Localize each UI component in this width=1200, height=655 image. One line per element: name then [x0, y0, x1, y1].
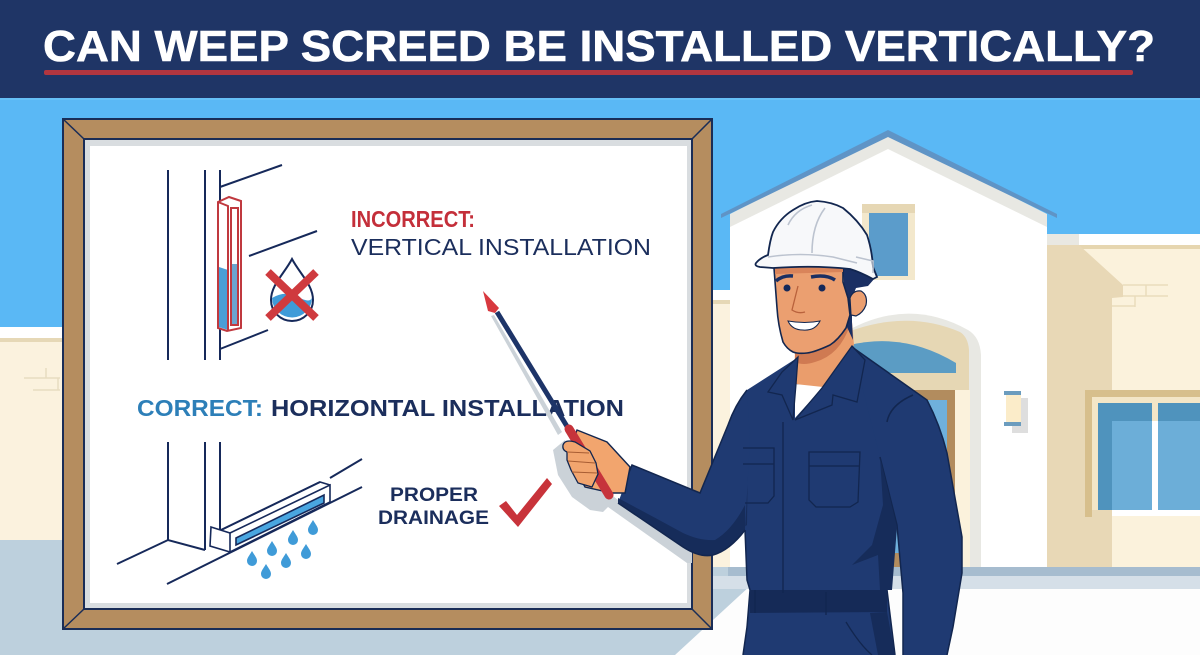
label: proper drainage: PROPER — [390, 485, 478, 506]
pointer and arm shadows on the board — [491, 315, 692, 563]
label: incorrect: VERTICAL INSTALLATION — [351, 234, 651, 260]
icon: water droplets — [247, 520, 318, 579]
right collar — [795, 346, 865, 420]
vertical weep screed in red outline — [218, 197, 241, 331]
cream wing behind house — [705, 290, 735, 567]
ear — [850, 291, 866, 316]
nose — [792, 286, 805, 313]
left side shadow — [740, 440, 748, 530]
neck — [794, 322, 854, 387]
label: correct: HORIZONTAL INSTALLATION — [271, 395, 624, 421]
face — [774, 266, 850, 353]
label: incorrect — [351, 206, 651, 260]
pavement kerb — [710, 567, 1200, 589]
pointer stick — [483, 291, 568, 428]
white shirt — [795, 384, 823, 418]
whiteboard frame — [63, 119, 712, 629]
diagram: correct horizontal installation — [117, 442, 362, 584]
wall lamp — [1004, 391, 1028, 433]
icon: red check mark — [499, 478, 552, 527]
right building wing — [1047, 234, 1200, 567]
main white house with gable roof — [721, 130, 1057, 567]
torso edge lines — [743, 530, 895, 655]
left neighbouring building — [0, 327, 70, 540]
forehead shadow — [775, 266, 843, 274]
left collar — [768, 357, 798, 420]
red pointer handle — [569, 429, 609, 495]
label: correct — [137, 395, 624, 421]
label: incorrect: INCORRECT: — [351, 206, 475, 232]
right chest pocket — [809, 452, 860, 507]
hand gripping the pointer — [563, 429, 630, 495]
fingers — [563, 441, 598, 487]
header banner — [0, 0, 1200, 100]
right arm — [852, 347, 962, 655]
palm — [568, 430, 630, 493]
left chest pocket — [743, 448, 774, 503]
belt — [750, 590, 887, 613]
torso — [738, 347, 900, 655]
right building window — [1085, 390, 1200, 517]
hard hat — [756, 201, 877, 279]
hair — [843, 266, 875, 340]
label: proper drainage — [378, 485, 489, 529]
presenter — [483, 201, 962, 655]
eyes and eyebrows — [776, 276, 835, 292]
body shadow — [852, 457, 897, 590]
icon: water drop crossed out — [268, 259, 316, 321]
title: CAN WEEP SCREED BE INSTALLED VERTICALLY? — [43, 22, 1155, 71]
smile — [788, 321, 820, 330]
diagram: incorrect vertical installation — [168, 165, 317, 360]
attic window — [862, 204, 915, 280]
trouser details — [755, 422, 895, 655]
arched entrance with door — [840, 314, 981, 567]
pointing arm — [618, 390, 750, 556]
horizontal weep screed — [210, 482, 330, 552]
label: proper drainage: DRAINAGE — [378, 508, 489, 529]
label: correct: CORRECT: — [137, 395, 263, 421]
head — [756, 201, 877, 353]
